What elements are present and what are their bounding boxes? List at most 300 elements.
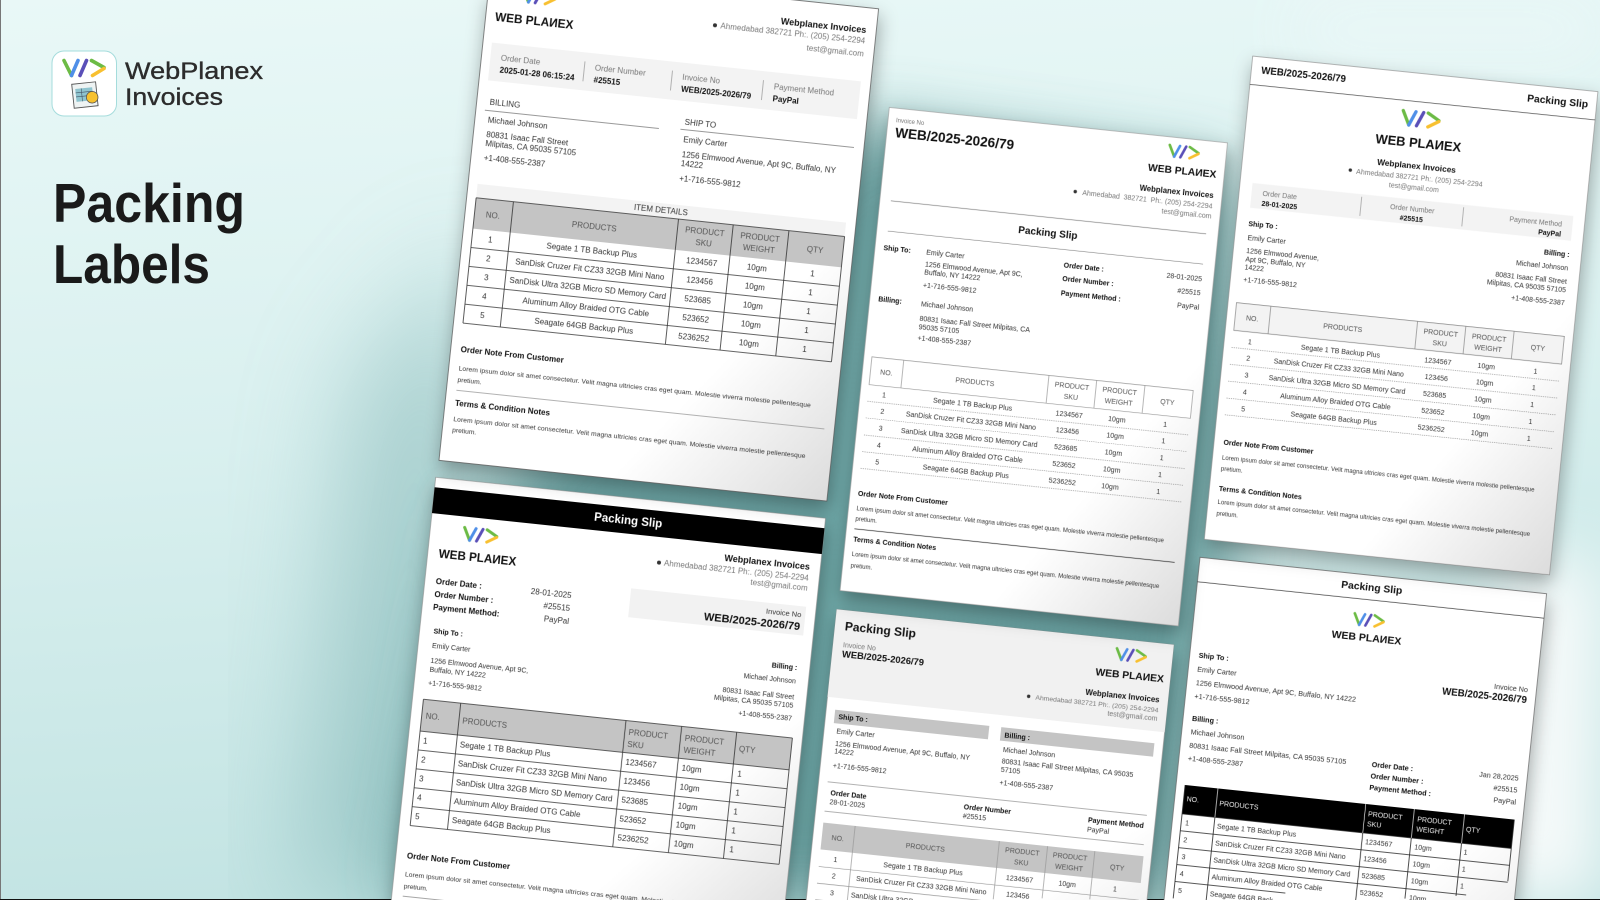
items table: Aluminum Alloy Braided OTG Cable: [912, 446, 1023, 465]
billing: +1-408-555-2387: [738, 710, 792, 723]
billing: Billing :: [1004, 733, 1030, 742]
billing: Billing :: [771, 662, 798, 672]
items table: 1: [833, 857, 838, 864]
items table: 1: [882, 392, 886, 400]
items table: SanDisk Ultra 32GB Micro SD Memory Card: [455, 778, 613, 804]
logo wordmark: [125, 58, 263, 111]
items table: Segate 1 TB Backup Plus: [1300, 344, 1381, 360]
order note: Lorem ipsum dolor sit amet consectetur. Velit magna ultricies cras eget quam. Molestie viverra molestie pellentesque: [856, 506, 1165, 544]
company address: Webplanex Invoices: [1085, 688, 1161, 705]
ship to: Ship To:: [883, 245, 911, 255]
items table: SanDisk Cruzer Fit CZ33 32GB Mini Nano: [515, 257, 665, 282]
order details: Order Date :: [1063, 262, 1104, 274]
order note: Order Note From Customer: [858, 491, 948, 507]
order details: PayPal: [1087, 827, 1110, 836]
items table: 1234567: [625, 758, 657, 770]
items table: 1: [804, 326, 810, 335]
items table: 10gm: [673, 839, 694, 850]
items table: 1234567: [686, 256, 718, 268]
items table: [410, 699, 792, 864]
order details: Payment Method: [1088, 817, 1144, 830]
order details: Order Number :: [1370, 771, 1424, 786]
billing: +1-408-555-2387: [1511, 295, 1565, 307]
billing: +1-408-555-2387: [483, 153, 546, 169]
items table: SKU: [695, 238, 712, 249]
items table: 3: [830, 890, 834, 898]
items table: QTY: [806, 245, 824, 255]
items table: 1: [735, 788, 741, 798]
billing: +1-408-555-2387: [999, 780, 1053, 792]
items table: 10gm: [675, 820, 696, 831]
items table: 1: [802, 345, 808, 354]
items table: Segate 1 TB Backup Plus: [546, 241, 637, 260]
terms notes: pretium.: [1216, 511, 1239, 519]
ship to: +1-716-555-9812: [679, 174, 742, 189]
items table: 5: [415, 812, 421, 822]
items table: 1: [488, 235, 494, 245]
company address: test@gmail.com: [750, 578, 808, 593]
items table: 10gm: [1106, 432, 1124, 441]
items table: 10gm: [1412, 861, 1430, 870]
ship to: +1-716-555-9812: [1194, 692, 1250, 706]
items table: 1: [810, 269, 816, 279]
items table: 5236252: [617, 833, 650, 846]
order details: Payment Method :: [1060, 290, 1121, 303]
order note: Lorem ipsum dolor sit amet consectetur. Velit magna ultricies cras eget quam. Molestie viverra molestie pellentesque: [458, 365, 811, 409]
items table: NO.: [425, 712, 440, 722]
items table: 3: [1244, 372, 1249, 380]
items table: 3: [419, 774, 425, 784]
company address: Webplanex Invoices: [1377, 157, 1457, 175]
items table: 5236252: [1417, 424, 1445, 434]
items table: 1: [1159, 455, 1164, 462]
items table: 1: [423, 736, 429, 746]
order note: [456, 345, 829, 429]
order note: Order Note From Customer: [1223, 439, 1314, 456]
title: Labels: [53, 233, 210, 295]
items table: ITEM DETAILS: [633, 203, 688, 217]
order details: Order Date :: [435, 577, 482, 591]
items table: 1: [1530, 402, 1534, 409]
ship to: Emily Carter: [926, 249, 965, 261]
items table: Aluminum Alloy Braided OTG Cable: [522, 296, 650, 319]
ship to: [675, 117, 855, 201]
items table: 10gm: [681, 764, 702, 775]
order summary band: 2025-01-28 06:15:24: [499, 66, 575, 82]
billing: [479, 97, 660, 180]
items table: 123456: [623, 777, 651, 788]
order summary band: Payment Method: [1509, 216, 1562, 229]
items table: NO.: [1186, 796, 1199, 805]
invoice number: Invoice No: [1494, 682, 1528, 694]
items table: PRODUCT: [740, 231, 780, 244]
ship to: 14222: [1244, 264, 1264, 273]
items table: 1: [1156, 489, 1161, 496]
items table: SKU: [627, 740, 644, 751]
items table: [463, 184, 846, 362]
items table: PRODUCT: [1423, 328, 1459, 339]
items table: Segate 1 TB Backup Plus: [1217, 824, 1297, 839]
packing slip heading: [888, 201, 1206, 264]
company address: Ahmedabad 382721 Ph:. (205) 254-2294: [1035, 695, 1159, 714]
items table: PRODUCT: [1054, 382, 1090, 392]
items table: SKU: [1367, 821, 1382, 830]
panel: invoice style with item details: [439, 0, 879, 501]
items table: 523685: [684, 294, 712, 306]
panel: centred logo with summary band: WEB/2025-2026/79: [1261, 66, 1347, 86]
ship to: Ship To :: [1248, 221, 1278, 231]
items table: NO.: [485, 210, 500, 221]
items table: 3: [878, 425, 883, 433]
items table: 1: [733, 807, 739, 817]
billing: Michael Johnson: [1516, 260, 1569, 272]
panel: centred logo with summary band: Packing Slip: [1527, 94, 1589, 111]
company address: [1026, 682, 1161, 723]
ship to: +1-716-555-9812: [1243, 277, 1297, 289]
order note: pretium.: [403, 883, 428, 893]
order details: 28-01-2025: [1166, 273, 1202, 283]
items table: PRODUCT: [1417, 816, 1453, 827]
ship to: Emily Carter: [836, 728, 876, 740]
items table: PRODUCTS: [462, 716, 507, 730]
items table: 1: [1528, 419, 1533, 426]
order note: pretium.: [1221, 467, 1243, 475]
items table: WEIGHT: [1416, 826, 1445, 836]
items table: 1234567: [1424, 357, 1452, 367]
order summary band: [1250, 183, 1573, 241]
items table: 10gm: [1414, 844, 1432, 853]
billing: +1-408-555-2387: [1187, 754, 1243, 768]
items table: 123456: [1363, 856, 1387, 865]
panel: packing slip grey header: [806, 609, 1174, 900]
items table: 5: [480, 311, 486, 320]
order summary band: Order Number: [1390, 204, 1435, 215]
items table: 1: [1161, 438, 1166, 446]
billing: 57105: [1000, 767, 1021, 776]
items table: 523652: [619, 814, 647, 826]
items table: 1: [731, 826, 737, 836]
billing: Billing:: [878, 296, 902, 306]
order summary band: [488, 43, 861, 119]
items table: 2: [1246, 356, 1251, 363]
items table: PRODUCT: [1052, 852, 1088, 863]
items table: SKU: [1063, 394, 1078, 402]
ship to: +1-716-555-9812: [428, 680, 482, 693]
items table: Segate 1 TB Backup Plus: [883, 862, 963, 877]
ship to: [1194, 651, 1359, 717]
items table: 10gm: [1470, 430, 1489, 439]
items table: 2: [880, 409, 885, 416]
items table: PRODUCTS: [905, 843, 945, 854]
items table: Seagate 64GB Backup Plus: [451, 816, 551, 835]
billing: +1-408-555-2387: [917, 335, 971, 348]
order details: [1369, 758, 1520, 807]
ship to: Emily Carter: [683, 135, 728, 149]
items table: 1: [1248, 339, 1252, 346]
items table: 10gm: [677, 801, 698, 812]
items table: 3: [1181, 854, 1186, 861]
billing: 80831 Isaac Fall Street: [722, 687, 795, 701]
ship to: [829, 710, 989, 786]
panel: packing slip grey header: Invoice No: [843, 642, 876, 653]
logo wordmark: Invoices: [125, 84, 223, 111]
items table: Aluminum Alloy Braided OTG Cable: [1280, 393, 1391, 412]
items table: 2: [831, 873, 836, 881]
items table: SanDisk Cruzer Fit CZ33 32GB Mini Nano: [856, 876, 987, 896]
order details: #25515: [1177, 288, 1201, 297]
title: [53, 172, 245, 295]
invoice number box: [628, 588, 806, 636]
billing: Michael Johnson: [1190, 727, 1245, 742]
order summary band: PayPal: [1538, 229, 1561, 239]
order details: [1060, 262, 1203, 312]
ship to: Buffalo, NY 14222: [924, 270, 981, 283]
order details: #25515: [543, 601, 571, 613]
items table: 1234567: [1365, 839, 1393, 849]
billing: [1485, 244, 1570, 307]
ship to: Apt 9C, Buffalo, NY: [1245, 256, 1306, 269]
order details: PayPal: [1177, 302, 1200, 312]
items table: 10gm: [742, 300, 764, 311]
billing: 80831 Isaac Fall Street Milpitas, CA: [919, 316, 1031, 334]
billing: 80831 Isaac Fall Street: [1495, 272, 1567, 286]
billing: Billing :: [1192, 714, 1219, 726]
items table: 523652: [1052, 461, 1076, 470]
items table: 4: [417, 793, 423, 803]
panel: invoice number header with dotted table: Invoice No: [896, 118, 925, 127]
terms notes: Terms & Condition Notes: [1218, 486, 1302, 501]
company address: [1072, 176, 1215, 221]
items table: PRODUCT: [1102, 387, 1138, 397]
items table: 523652: [682, 313, 710, 325]
items table: Segate 1 TB Backup Plus: [459, 740, 551, 759]
items table: SKU: [1432, 340, 1447, 348]
items table: [1173, 785, 1514, 900]
items table: 10gm: [1101, 483, 1119, 492]
items table: WEIGHT: [1104, 398, 1133, 408]
ship to: 1256 Elmwood Avenue, Apt 9C, Buffalo, NY: [835, 741, 971, 762]
ship to: Ship To :: [1198, 651, 1229, 663]
panel: packing slip grey header: WEB PLAИEX: [1095, 667, 1164, 685]
order note: [1221, 439, 1537, 505]
billing: Michael Johnson: [1002, 747, 1056, 759]
company address: Webplanex Invoices: [724, 553, 810, 572]
items table: 10gm: [740, 319, 762, 330]
items table: [861, 357, 1193, 502]
ship to: 1256 Elmwood Avenue, Apt 9C, Buffalo, NY 14222: [1195, 678, 1357, 704]
order note: [854, 491, 1179, 562]
items table: 1: [1526, 436, 1531, 443]
items table: [815, 823, 1144, 900]
items table: WEIGHT: [1474, 344, 1503, 354]
order details: Payment Method :: [1369, 783, 1431, 798]
order details: Order Date :: [1371, 760, 1414, 773]
panel: packing slip black table: WEB PLAИEX: [1331, 629, 1402, 648]
order details: [433, 577, 573, 626]
items table: 10gm: [738, 338, 760, 349]
order details: Order Number :: [1062, 276, 1114, 288]
ship to: SHIP TO: [684, 118, 717, 130]
items table: 2: [1183, 837, 1188, 845]
company address: Webplanex Invoices: [780, 16, 867, 35]
panel: invoice number header with dotted table: WEB PLAИEX: [1147, 163, 1217, 181]
items table: 1: [1531, 385, 1536, 392]
items table: 2: [486, 254, 492, 264]
items table: PRODUCTS: [955, 377, 995, 389]
panel: invoice number header with dotted table: WEB/2025-2026/79: [895, 125, 1015, 153]
items table: 10gm: [1472, 413, 1490, 422]
items table: NO.: [831, 835, 844, 843]
billing: Michael Johnson: [487, 116, 548, 131]
items table: Segate 1 TB Backup Plus: [933, 397, 1013, 413]
items table: 10gm: [1058, 881, 1076, 889]
panel: invoice number header with dotted table: [840, 107, 1227, 626]
billing: Michael Johnson: [921, 301, 974, 314]
billing: [712, 657, 798, 723]
order details: Payment Method:: [433, 603, 500, 619]
panel: centred logo with summary band: WEB PLAИEX: [1375, 131, 1462, 155]
items table: Seagate 64GB Backup Plus: [534, 317, 634, 336]
items table: 523652: [1421, 408, 1445, 417]
order details: PayPal: [543, 614, 570, 626]
items table: WEIGHT: [742, 243, 775, 255]
items table: 123456: [686, 275, 714, 287]
ship to: [428, 628, 532, 697]
items table: WEIGHT: [1055, 864, 1084, 874]
terms notes: Lorem ipsum dolor sit amet consectetur. Velit magna ultricies cras eget quam. Molestie viverra molestie pellentesque: [851, 552, 1160, 590]
order details: 28-01-2025: [530, 587, 573, 600]
billing: Milpitas, CA 95035 57105: [485, 139, 577, 158]
billing: Michael Johnson: [743, 673, 796, 686]
items table: 10gm: [1477, 363, 1495, 371]
terms notes: Lorem ipsum dolor sit amet consectetur. Velit magna ultricies cras eget quam. Molestie viverra molestie pellentesque: [1217, 500, 1531, 538]
items table: 1: [1461, 866, 1466, 874]
items table: SanDisk Cruzer Fit CZ33 32GB Mini Nano: [905, 411, 1036, 432]
order note: pretium.: [855, 517, 877, 525]
company address: test@gmail.com: [806, 44, 865, 59]
billing: Milpitas, CA 95035 57105: [713, 695, 794, 710]
panel: packing slip grey header: Packing Slip: [844, 619, 917, 641]
billing: [1187, 714, 1350, 779]
items table: NO.: [880, 370, 893, 378]
items table: 3: [484, 273, 490, 283]
items table: NO.: [1246, 315, 1259, 324]
items table: 10gm: [1108, 416, 1126, 425]
items table: 1: [1463, 849, 1468, 857]
items table: 10gm: [1410, 878, 1429, 887]
billing: 80831 Isaac Fall Street Milpitas, CA 95035 57105: [1189, 741, 1347, 766]
ship to: 14222: [834, 748, 854, 757]
invoice number: [1442, 676, 1529, 706]
ship to: Ship To :: [433, 628, 463, 638]
company address: test@gmail.com: [1107, 711, 1158, 723]
items table: PRODUCT: [1368, 811, 1404, 822]
items table: 1: [1533, 368, 1538, 376]
order details: #25515: [1493, 783, 1518, 795]
order summary band: WEB/2025-2026/79: [681, 85, 752, 101]
order summary band: Order Number: [594, 63, 647, 78]
items table: 523652: [1359, 890, 1383, 899]
items table: 10gm: [746, 262, 768, 274]
ship to: 14222: [680, 159, 704, 170]
billing: 80831 Isaac Fall Street Milpitas, CA 95035: [1001, 758, 1134, 779]
items table: SanDisk Cruzer Fit CZ33 32GB Mini Nano: [457, 759, 608, 784]
items table: 5236252: [1048, 477, 1076, 487]
ship to: 1256 Elmwood Avenue,: [1246, 248, 1319, 263]
panel: packing slip black banner: Packing Slip: [594, 512, 663, 531]
items table: 1: [1163, 422, 1167, 429]
order summary band: PayPal: [772, 94, 799, 106]
items table: QTY: [738, 745, 756, 755]
order details: Order Date: [830, 790, 867, 801]
items table: 123456: [1055, 427, 1079, 437]
items table: 4: [482, 292, 488, 301]
icon: app tile: [52, 51, 116, 116]
items table: Aluminum Alloy Braided OTG Cable: [453, 797, 581, 819]
order note: pretium.: [457, 377, 482, 386]
panel: packing slip black table: Packing Slip: [1341, 580, 1403, 597]
order note: [403, 851, 760, 900]
items table: PRODUCT: [684, 734, 725, 747]
items table: Seagate 64GB Backup Plus: [1290, 411, 1378, 427]
terms notes: pretium.: [452, 427, 477, 437]
items table: WEIGHT: [683, 746, 716, 758]
items table: PRODUCT: [628, 728, 669, 741]
items table: 523685: [1361, 873, 1385, 882]
ship to: +1-716-555-9812: [923, 282, 977, 295]
items table: PRODUCTS: [571, 220, 617, 234]
company address: Webplanex Invoices: [1139, 183, 1215, 200]
items table: SanDisk Ultra 32GB Micro SD Memory Card: [509, 276, 666, 301]
ship to: +1-716-555-9812: [832, 763, 887, 775]
ship to: 1256 Elmwood Avenue, Apt 9C, Buffalo, NY: [681, 150, 837, 175]
company address: [656, 546, 811, 593]
billing: BILLING: [489, 98, 521, 110]
items table: SanDisk Ultra 32GB Micro SD Memory Card: [900, 428, 1038, 449]
logo wordmark: WebPlanex: [125, 58, 263, 85]
order summary band: Order Date: [500, 54, 541, 67]
items table: SanDisk Ultra 32GB Micro SD Memory Card: [1213, 857, 1351, 879]
panel: invoice style with item details: WEB PLAИEX: [494, 10, 574, 32]
order details: Order Number :: [434, 590, 494, 605]
items table: 5236252: [678, 332, 710, 344]
order summary band: Payment Method: [773, 82, 834, 98]
company address: Ahmedabad 382721 Ph:. (205) 254-2294: [1356, 169, 1483, 189]
billing: 95035 57105: [918, 324, 960, 335]
ship to: Emily Carter: [432, 643, 471, 654]
ship to: Ship To :: [838, 714, 868, 724]
ship to: 1256 Elmwood Avenue, Apt 9C,: [925, 262, 1023, 279]
items table: 523685: [1423, 391, 1447, 400]
items table: [1225, 303, 1564, 449]
terms notes: pretium.: [850, 563, 873, 571]
items table: PRODUCT: [1005, 847, 1041, 858]
items table: 523685: [621, 796, 649, 807]
order summary band: Order Date: [1262, 191, 1297, 201]
items table: QTY: [1530, 345, 1546, 353]
order summary band: #25515: [593, 75, 621, 87]
items table: 4: [877, 443, 881, 450]
order note: Lorem ipsum dolor sit amet consectetur. Velit magna ultricies cras eget quam. Molestie viverra molestie pellentesque: [1222, 456, 1535, 494]
items table: 10gm: [1475, 379, 1494, 388]
company address: [711, 9, 867, 59]
order details: 28-01-2025: [829, 799, 866, 810]
items table: 123456: [1424, 374, 1448, 383]
terms notes: [1216, 486, 1532, 549]
brand logo lockup: [52, 51, 263, 116]
ship to: 1256 Elmwood Avenue, Apt 9C,: [430, 658, 529, 675]
items table: PRODUCT: [685, 225, 725, 238]
